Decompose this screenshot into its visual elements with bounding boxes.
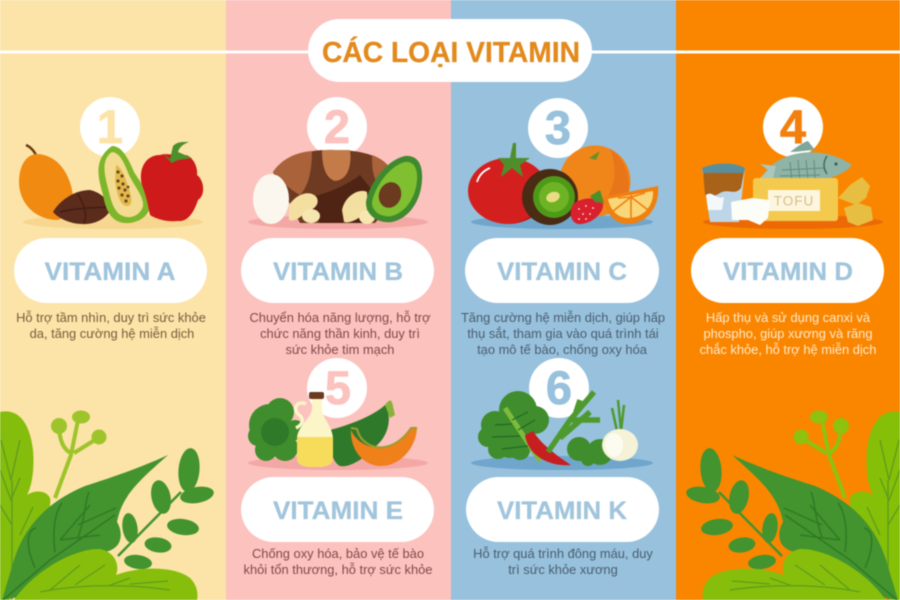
label pill xyxy=(14,238,207,303)
decorative plants: bottom left xyxy=(0,410,215,600)
title: CÁC LOẠI VITAMIN xyxy=(322,35,580,69)
label pill: VITAMIN A xyxy=(44,258,176,286)
description: tạo mô tế bào, chống oxy hóa xyxy=(477,342,648,357)
description: Hỗ trợ quá trình đông máu, duy xyxy=(473,546,653,561)
panel: orange column background xyxy=(676,0,900,600)
number badge 1: 1 xyxy=(97,100,123,153)
illustration: vitamin D foods: TOFU xyxy=(774,194,814,208)
label pill xyxy=(691,238,884,303)
lime stem with buds xyxy=(51,410,106,498)
description: Tăng cường hệ miễn dịch, giúp hấp xyxy=(461,310,665,325)
label pill xyxy=(466,477,659,542)
description: Hỗ trợ tầm nhìn, duy trì sức khỏe xyxy=(16,310,206,325)
number badge 3 xyxy=(528,98,588,158)
description: phospho, giúp xương và răng xyxy=(703,326,873,341)
card: vitamin K xyxy=(466,358,659,577)
description: thụ sắt, tham gia vào quá trình tái xyxy=(467,326,659,341)
number badge 5 xyxy=(307,358,367,418)
panel: blue column background xyxy=(451,0,676,600)
description: khỏi tổn thương, hỗ trợ sức khỏe xyxy=(244,562,432,577)
description: Hấp thụ và sử dụng canxi và xyxy=(706,310,871,325)
description: Chuyển hóa năng lượng, hỗ trợ xyxy=(249,310,431,325)
card: vitamin B xyxy=(241,97,434,357)
description: chức năng thần kinh, duy trì xyxy=(260,326,420,341)
description: chắc khỏe, hỗ trợ hệ miễn dịch xyxy=(700,342,876,357)
number badge 1 xyxy=(80,97,140,157)
illustration: vitamin A foods xyxy=(19,142,203,229)
description: sức khỏe tim mạch xyxy=(286,342,394,357)
illustration: vitamin B foods xyxy=(248,150,428,229)
number badge 4 xyxy=(763,97,823,157)
card: vitamin A xyxy=(14,97,207,341)
card: vitamin C xyxy=(461,98,665,357)
number badge 3: 3 xyxy=(545,101,571,154)
left light leaf xyxy=(0,411,50,600)
label pill xyxy=(465,238,659,303)
panel: yellow column background xyxy=(0,0,226,600)
label pill: VITAMIN D xyxy=(723,258,853,286)
illustration: vitamin D foods xyxy=(702,141,883,229)
description: Chống oxy hóa, bảo vệ tế bào xyxy=(252,546,424,561)
label pill: VITAMIN E xyxy=(273,497,403,525)
bottom lime leaves xyxy=(14,549,197,600)
label pill: VITAMIN K xyxy=(497,497,627,525)
number badge 6: 6 xyxy=(546,361,572,414)
label pill xyxy=(241,477,434,542)
card: vitamin E xyxy=(241,358,434,577)
illustration: vitamin E foods xyxy=(248,392,428,470)
label pill: VITAMIN C xyxy=(497,258,627,286)
label pill xyxy=(241,238,434,303)
title xyxy=(308,19,592,82)
number badge 4: 4 xyxy=(780,100,806,153)
card: vitamin D xyxy=(691,97,884,357)
illustration: vitamin K foods xyxy=(471,391,653,470)
green sprig xyxy=(118,447,215,571)
illustration: vitamin C foods xyxy=(468,143,658,229)
label pill: VITAMIN B xyxy=(273,258,403,286)
description: trì sức khỏe xương xyxy=(508,562,618,577)
number badge 2 xyxy=(307,97,367,157)
number badge 6 xyxy=(529,358,589,418)
number badge 2: 2 xyxy=(324,100,350,153)
dark big leaf xyxy=(2,455,168,600)
number badge 5: 5 xyxy=(325,361,351,414)
panel: pink column background xyxy=(226,0,451,600)
description: da, tăng cường hệ miễn dịch xyxy=(30,326,194,341)
decorative plants: bottom right xyxy=(685,410,900,600)
